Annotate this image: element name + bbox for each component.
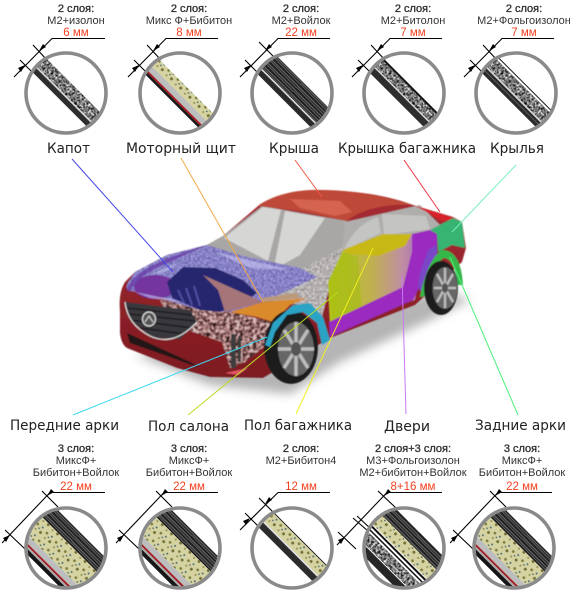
hood left dark area	[134, 275, 176, 299]
caption: Микс Ф+Бибитон	[146, 15, 232, 27]
panel: cabin floor layers	[116, 443, 232, 600]
rear quarter violet	[418, 245, 437, 293]
door zone	[328, 234, 425, 322]
dimension lines	[337, 491, 442, 549]
frame texture	[277, 246, 345, 316]
pointer: trunk lid	[404, 160, 440, 212]
panel: roof layers	[240, 3, 335, 133]
panel: doors layers	[337, 443, 467, 600]
arrowheads	[3, 489, 54, 542]
dimension lines	[464, 38, 554, 77]
panel: hood layers	[14, 3, 106, 133]
thickness: 22 мм	[60, 481, 92, 493]
hood texture	[125, 243, 320, 315]
pointer: doors	[402, 275, 406, 414]
red bumper highlight	[225, 368, 248, 375]
hood zone	[127, 245, 317, 312]
orange floor zone	[230, 298, 307, 322]
yellow interior	[343, 234, 412, 256]
arrowheads	[243, 497, 272, 525]
front wheel	[264, 310, 318, 384]
caption: 2 слоя:	[58, 3, 94, 15]
body frame under the windshield	[262, 246, 345, 317]
caption: Бибитон+Войлок	[33, 467, 119, 479]
car body	[120, 191, 466, 378]
side frame	[207, 206, 347, 272]
trunk lid	[413, 205, 457, 221]
lower grille	[127, 333, 200, 368]
arrowheads	[468, 44, 496, 72]
caption: 2 слоя:	[283, 3, 319, 15]
dimension lines	[240, 492, 330, 530]
rear wheel arch	[420, 250, 463, 297]
panel: trunk lid layers	[352, 3, 445, 133]
label: trunk lid: Крышка багажника	[338, 141, 476, 157]
thickness: 7 мм	[400, 27, 426, 39]
caption: 2 слоя:	[506, 3, 542, 15]
label: cabin floor: Пол салона	[148, 419, 229, 435]
arrowheads	[338, 489, 391, 544]
interior floor yellow-green	[328, 252, 362, 322]
engine ribs	[178, 286, 200, 306]
dimension lines	[128, 38, 218, 77]
thickness: 6 мм	[63, 27, 89, 39]
engine mechanics	[160, 300, 272, 369]
caption: М2+Бибитон4	[266, 455, 336, 467]
pointer: front arches	[73, 337, 267, 415]
pointer: firewall	[181, 158, 263, 302]
roof panel	[258, 190, 413, 221]
label: firewall: Моторный щит	[126, 141, 236, 157]
dimension lines	[14, 38, 105, 77]
arrowheads	[356, 44, 384, 72]
rear wing zone	[430, 218, 465, 252]
label: trunk floor: Пол багажника	[244, 418, 352, 434]
door glass and pillars	[342, 205, 440, 252]
grille slats	[127, 308, 195, 334]
dimension lines	[116, 491, 218, 549]
label: hood: Капот	[47, 141, 90, 157]
pointer: rear arches	[450, 257, 518, 415]
thickness: 7 мм	[511, 27, 537, 39]
pointer: trunk floor	[296, 248, 373, 414]
door purple sill	[329, 230, 437, 337]
pointer: roof	[295, 160, 322, 197]
dimension lines	[450, 491, 552, 549]
arrowheads	[451, 489, 502, 542]
panel: rear arches layers	[450, 443, 565, 600]
section circle	[24, 506, 108, 590]
chrome trim	[125, 302, 197, 339]
engine block	[167, 267, 257, 312]
car shadow	[135, 290, 470, 394]
thickness: 8 мм	[176, 27, 202, 39]
hood front band	[127, 245, 207, 292]
caption: 3 слоя:	[171, 443, 207, 455]
section circle	[252, 50, 335, 133]
panel: trunk floor layers	[240, 443, 336, 588]
arrowheads	[132, 44, 160, 72]
section circle	[252, 507, 333, 588]
caption: М2+Войлок	[272, 15, 331, 27]
dimension lines	[352, 38, 442, 77]
label: front arches: Передние арки	[10, 418, 119, 434]
caption: 2 слоя:	[171, 3, 207, 15]
caption: М3+Фольгоизолон	[366, 455, 460, 467]
thickness: 12 мм	[285, 481, 317, 493]
caption: М2+бибитон+Войлок	[359, 467, 467, 479]
brown plate	[203, 275, 263, 312]
grille	[125, 302, 197, 339]
roof highlight	[290, 199, 352, 216]
thickness: 22 мм	[506, 481, 538, 493]
pointer: wings	[452, 165, 516, 232]
section circle	[476, 52, 557, 133]
pointer: cabin floor	[188, 292, 338, 415]
section circle	[362, 506, 446, 590]
caption: МиксФ+	[169, 455, 209, 467]
section circle	[140, 53, 220, 133]
dimension lines	[240, 38, 330, 77]
mazda logo	[142, 312, 156, 326]
label: doors: Двери	[384, 419, 430, 435]
section circle	[472, 506, 556, 590]
caption: 3 слоя:	[58, 443, 94, 455]
pointer: hood	[72, 159, 173, 272]
panel: front arches layers	[2, 443, 119, 600]
section circle	[26, 53, 106, 133]
caption: Бибитон+Войлок	[146, 467, 232, 479]
radiator bars	[231, 334, 241, 368]
rear wheel	[424, 261, 458, 315]
car illustration	[120, 190, 470, 394]
label: roof: Крыша	[269, 141, 319, 157]
caption: МиксФ+	[56, 455, 96, 467]
thickness: 8+16 мм	[391, 481, 436, 493]
section circle	[138, 506, 222, 590]
section circle	[364, 53, 444, 133]
side windows	[344, 214, 430, 250]
caption: 2 слоя:	[283, 443, 319, 455]
caption: МиксФ+	[502, 455, 542, 467]
arrowheads	[117, 489, 168, 542]
arrowheads	[18, 44, 46, 72]
arrowheads	[244, 44, 272, 72]
caption: М2+Битолон	[381, 15, 445, 27]
caption: М2+изолон	[47, 15, 105, 27]
caption: 3 слоя:	[504, 443, 540, 455]
thickness: 22 мм	[173, 481, 205, 493]
windshield	[224, 207, 325, 265]
orange edge	[262, 293, 300, 302]
panel: firewall layers	[128, 3, 232, 133]
panel: wings layers	[464, 3, 570, 133]
thickness: 22 мм	[285, 27, 317, 39]
caption: М2+Фольгоизолон	[477, 15, 570, 27]
label: wings: Крылья	[490, 141, 544, 157]
hood light highlights	[135, 252, 290, 303]
dimension lines	[2, 491, 105, 549]
caption: Бибитон+Войлок	[479, 467, 565, 479]
caption: 2 слоя+3 слоя:	[375, 443, 451, 455]
caption: 2 слоя:	[395, 3, 431, 15]
front wheel arch	[265, 303, 330, 347]
label: rear arches: Задние арки	[475, 418, 566, 434]
